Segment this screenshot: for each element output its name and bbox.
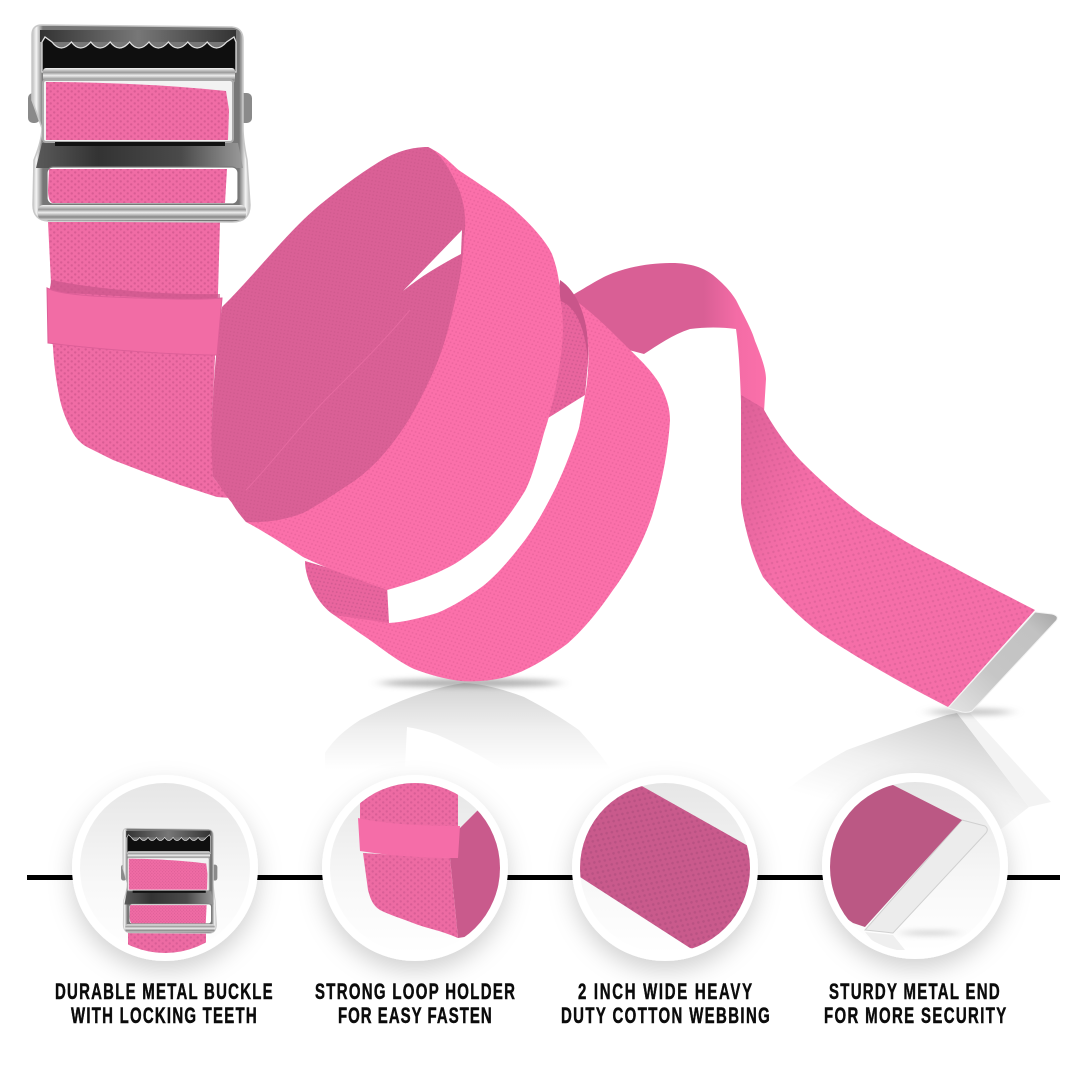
caption: DURABLE METAL BUCKLE — [55, 979, 273, 1004]
lower band underside — [305, 561, 389, 624]
upper webbing — [46, 82, 229, 140]
grey top rim — [40, 30, 236, 42]
tail shading — [741, 395, 887, 640]
thumbnail circle — [822, 773, 1008, 959]
caption: FOR EASY FASTEN — [338, 1003, 492, 1028]
elastic loop holder — [47, 288, 222, 355]
inner disc — [330, 783, 500, 953]
lower loop band — [305, 280, 670, 681]
inner disc — [830, 782, 1000, 952]
caption: FOR MORE SECURITY — [824, 1003, 1007, 1028]
tail upper fold — [571, 263, 766, 412]
caption: 2 INCH WIDE HEAVY — [578, 979, 752, 1004]
metal end tip — [948, 612, 1057, 712]
inner disc — [80, 783, 250, 953]
metal buckle — [28, 25, 252, 222]
main band outer face — [232, 147, 563, 590]
feature 4: metal end — [820, 773, 1008, 1028]
floor reflection of belt — [325, 679, 1051, 830]
caption — [561, 979, 770, 1028]
strap below thumbnail buckle — [128, 933, 206, 953]
main loop band — [212, 147, 563, 590]
feature 2: loop holder — [315, 775, 515, 1028]
roller window — [43, 80, 233, 142]
side pivots — [28, 93, 40, 123]
zoomed loop holder — [358, 783, 500, 938]
zoomed metal end — [820, 780, 987, 950]
frame — [32, 25, 250, 222]
thumbnail buckle — [121, 828, 217, 933]
sliding bar — [43, 68, 235, 83]
caption — [315, 979, 515, 1028]
black window with teeth — [42, 37, 236, 72]
lower slot — [47, 167, 238, 204]
feature 1: buckle — [55, 775, 273, 1028]
left strap below buckle — [47, 222, 230, 498]
lower band front — [334, 294, 670, 681]
seam — [246, 310, 410, 490]
caption: DUTY COTTON WEBBING — [561, 1003, 770, 1028]
thumbnail circle — [572, 775, 758, 961]
caption — [824, 979, 1007, 1028]
inner shadow on lower band — [558, 280, 588, 395]
middle dark bar — [36, 143, 243, 168]
bottom chrome — [38, 205, 246, 220]
caption: STURDY METAL END — [829, 979, 1000, 1004]
zoomed webbing — [580, 786, 750, 948]
caption — [55, 979, 273, 1028]
belt tail with metal end — [571, 263, 1057, 712]
shadow above holder — [50, 280, 220, 302]
thumbnail circle — [322, 775, 508, 961]
horizontal rule — [27, 875, 1060, 880]
tail lower strap — [741, 395, 1035, 707]
back of inner loop — [548, 296, 588, 418]
lower webbing — [48, 169, 227, 203]
caption: STRONG LOOP HOLDER — [315, 979, 515, 1004]
inner disc — [580, 783, 750, 953]
main band inner face — [212, 147, 465, 522]
thumbnail circle — [72, 775, 258, 961]
feature 3: webbing — [561, 775, 770, 1028]
gap in loop — [403, 230, 462, 291]
caption: WITH LOCKING TEETH — [71, 1003, 257, 1028]
